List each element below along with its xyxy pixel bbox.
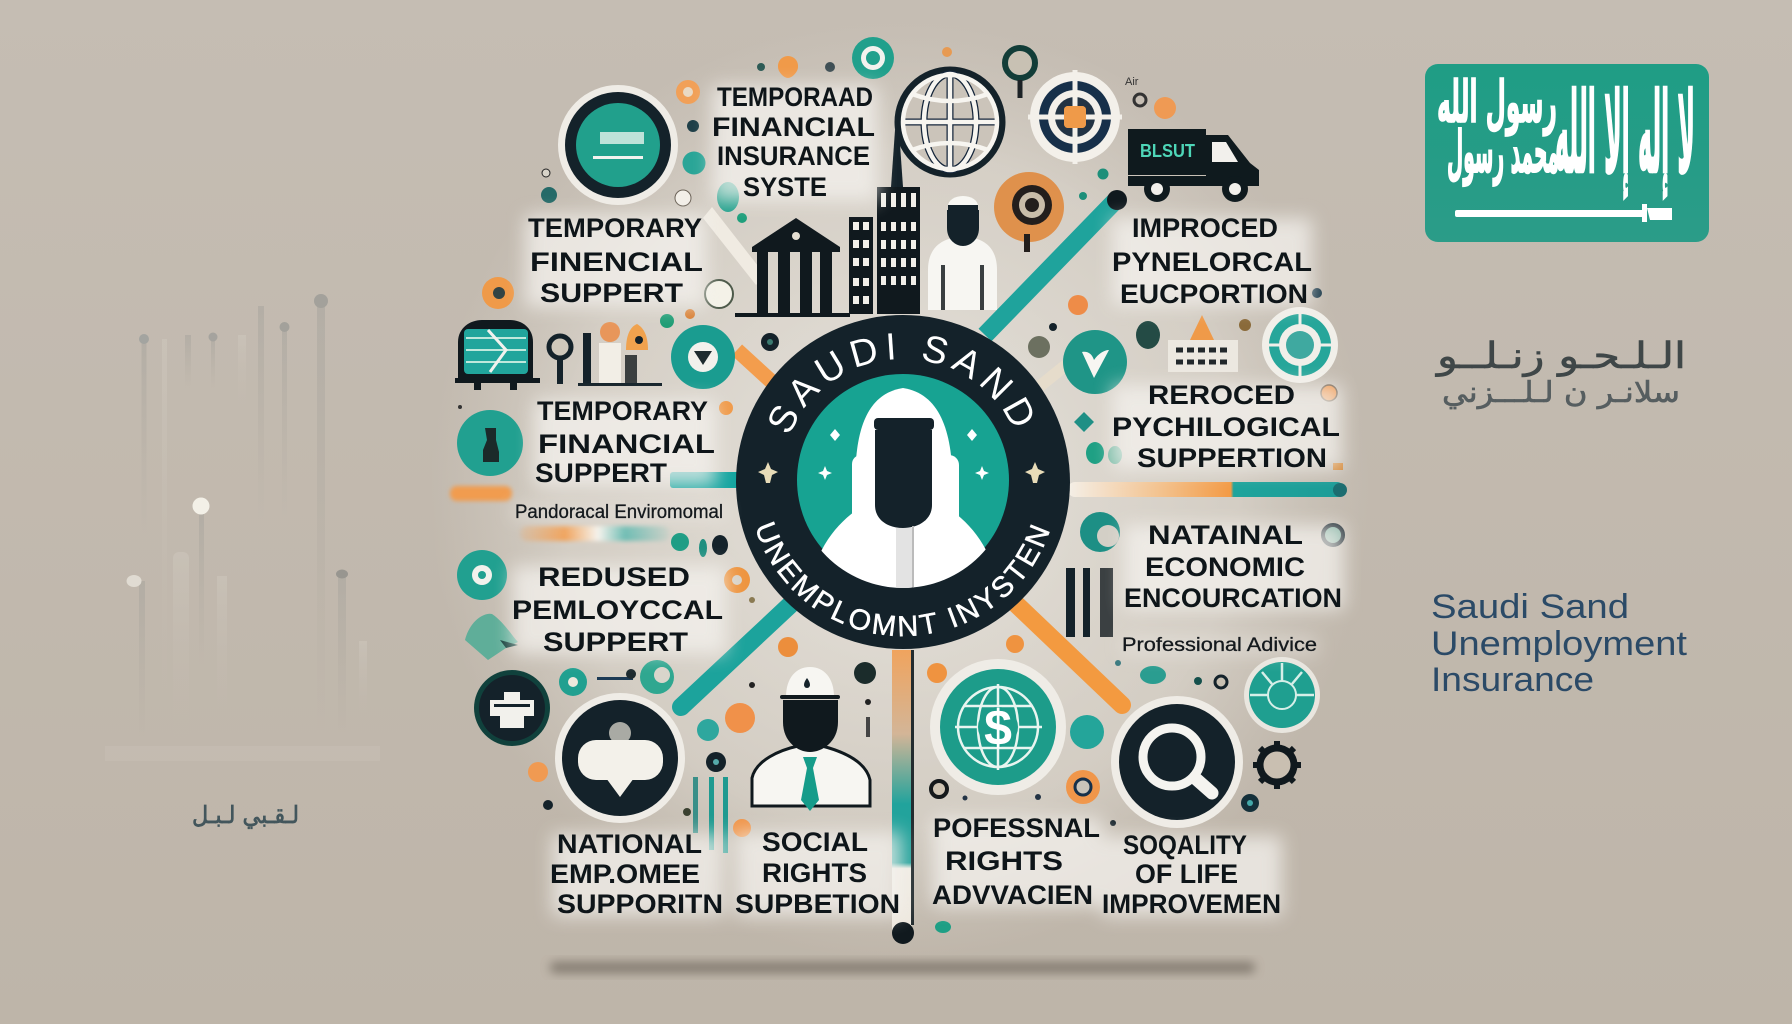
icon: globe <box>898 70 1002 174</box>
label: Redused Pemloyccal Suppert: REDUSED <box>538 562 690 592</box>
title: Saudi Sand Unemployment Insurance: Saudi Sand <box>1431 588 1629 626</box>
spoke: lower right orange <box>1015 603 1122 705</box>
icon: magnifier badge <box>1111 696 1243 828</box>
label: Natainal Economic Encourcation: ECONOMIC <box>1145 552 1305 582</box>
icon: gear <box>1253 741 1301 789</box>
label: Reroced Pychilogical Suppertion: SUPPERTION <box>1137 443 1327 473</box>
label: Natainal Economic Encourcation: NATAINAL <box>1148 520 1303 550</box>
label: Natainal Economic Encourcation: ENCOURCATION <box>1124 583 1342 613</box>
dollar sign: $ <box>984 700 1012 756</box>
spoke: left teal bar <box>670 472 740 488</box>
icon: delivery truck <box>1128 129 1259 202</box>
label: Improced Pynelorcal Eucportion: EUCPORTION <box>1120 279 1308 309</box>
spoke: lower left teal <box>681 605 790 707</box>
icon: small teal target <box>852 37 894 79</box>
label: Pofessnal Rights Advvacien: ADVVACIEN <box>932 880 1093 910</box>
spoke: upper left orange <box>737 350 772 382</box>
label: Reroced Pychilogical Suppertion <box>1112 380 1340 473</box>
label: Improced Pynelorcal Eucportion: PYNELORCAL <box>1112 247 1312 277</box>
label: Pofessnal Rights Advvacien <box>932 813 1100 910</box>
spoke: right horizontal gradient <box>1068 482 1347 497</box>
spoke: upper left cream <box>675 190 765 285</box>
faint bar chart: left side <box>105 294 380 761</box>
spoke: left blurred gradient <box>520 526 670 541</box>
icon: flag badge top left <box>558 85 678 205</box>
label: Temporary Financial Suppert (middle): TEMPORARY <box>537 396 708 426</box>
label: Pandoracal Enviromomal: Pandoracal Enviromomal <box>515 502 723 523</box>
emblem stars <box>758 429 1045 483</box>
label: Redused Pemloyccal Suppert: PEMLOYCCAL <box>512 595 723 625</box>
icon: office towers <box>849 130 920 314</box>
label: Temporary Finencial Suppert (top): FINENCIAL <box>530 247 703 277</box>
label: Temporary Finencial Suppert (top): SUPPERT <box>540 278 684 308</box>
ground shadow <box>550 962 1255 973</box>
label: Pofessnal Rights Advvacien: RIGHTS <box>945 846 1063 876</box>
title: Saudi Sand Unemployment Insurance: Unemployment <box>1431 625 1688 663</box>
label: Soqality of Life Improvemen: SOQALITY <box>1123 830 1247 860</box>
label: Social Rights Supbetion: RIGHTS <box>762 858 867 888</box>
label: Temporarad Financial Insurance Syste: SYSTE <box>743 172 827 202</box>
emblem figure <box>821 388 986 588</box>
label: Soqality of Life Improvemen <box>1102 830 1281 919</box>
label: Redused Pemloyccal Suppert <box>512 562 723 657</box>
label: Social Rights Supbetion: SUPBETION <box>735 889 900 919</box>
icon: target <box>1028 70 1122 164</box>
label: Temporarad Financial Insurance Syste: FINANCIAL <box>712 112 875 142</box>
label: Professional Adivice: Professional Adivice <box>1122 635 1317 656</box>
label: Temporary Financial Suppert (middle): SUPPERT <box>535 458 668 488</box>
truck label: BLSUT <box>1140 141 1195 161</box>
small annotation: Air <box>1125 76 1139 88</box>
emblem title top: SAUDI SAND <box>769 333 1032 432</box>
Arabic heading: right column: الـلـحـو زنـلــو <box>1435 336 1686 377</box>
label: Soqality of Life Improvemen: OF LIFE <box>1135 859 1238 889</box>
central light halo <box>430 20 1370 960</box>
label: Natainal Economic Encourcation <box>1124 520 1342 613</box>
label: Reroced Pychilogical Suppertion: PYCHILOGICAL <box>1112 412 1340 442</box>
icon: teal shield badge <box>457 550 507 600</box>
icon: teal ring badge <box>1262 307 1338 383</box>
Arabic caption: left side: لـقـبي لـبـل <box>192 801 299 829</box>
icon: check badge <box>1063 330 1127 394</box>
flag shahada calligraphy: رسول الله <box>1437 68 1557 137</box>
icon: orange swirl <box>994 172 1064 252</box>
icon: teal wheel globe <box>1244 657 1320 733</box>
icon: worker <box>752 667 870 811</box>
label: Temporary Financial Suppert (middle): FINANCIAL <box>538 429 715 459</box>
flag panel <box>1425 64 1709 242</box>
icon: monitor <box>455 320 540 390</box>
title: Saudi Sand Unemployment Insurance: Insurance <box>1431 661 1594 699</box>
emblem title bottom: UNEMPLOMNT INYSTEN <box>757 521 1050 636</box>
icon: robed man <box>928 196 997 310</box>
label: Social Rights Supbetion: SOCIAL <box>762 827 868 857</box>
label: Temporary Finencial Suppert (top) <box>528 213 703 308</box>
label: National Emp.ome Supporitn: EMP.OMEE <box>550 859 700 889</box>
connector spokes <box>450 190 1347 944</box>
icon: speech pill badge <box>555 693 685 823</box>
icon: bank <box>735 218 850 317</box>
spoke: cream stub by check icon <box>1040 365 1066 386</box>
label: Pofessnal Rights Advvacien: POFESSNAL <box>933 813 1100 843</box>
icon: magnifier and bottles <box>549 322 662 386</box>
label: Temporarad Financial Insurance Syste: TEMPORAAD <box>717 82 873 112</box>
label: National Emp.ome Supporitn: NATIONAL <box>557 829 702 859</box>
label: Soqality of Life Improvemen: IMPROVEMEN <box>1102 889 1281 919</box>
label halos <box>512 86 1344 916</box>
spoke: left orange blur <box>450 486 512 501</box>
central emblem <box>736 315 1070 649</box>
label: Temporary Finencial Suppert (top): TEMPORARY <box>528 213 702 243</box>
title: Saudi Sand Unemployment Insurance <box>1431 588 1688 699</box>
icon: dollar globe <box>930 659 1066 795</box>
decorative dots <box>458 47 1343 933</box>
emblem teal disc <box>797 374 1009 586</box>
icon: teal bottle badge <box>457 410 523 476</box>
label: National Emp.ome Supporitn <box>550 829 723 919</box>
flag shahada calligraphy <box>1437 68 1695 200</box>
icon: leaf <box>465 614 518 660</box>
label: Improced Pynelorcal Eucportion: IMPROCED <box>1132 213 1278 243</box>
spoke: upper right teal <box>985 190 1127 335</box>
label: Social Rights Supbetion <box>735 827 900 919</box>
label: Temporarad Financial Insurance Syste: INSURANCE <box>717 141 870 171</box>
emblem ring <box>736 315 1070 649</box>
flag shahada calligraphy: محمد رسول <box>1447 118 1559 187</box>
spoke: vertical gradient <box>892 650 914 944</box>
icon: dark teal mask badge <box>474 670 550 746</box>
icon: teal diamond badge <box>671 325 735 389</box>
icon: small building <box>1168 315 1238 372</box>
label: National Emp.ome Supporitn: SUPPORITN <box>557 889 723 919</box>
icon: triple bars <box>1066 568 1113 637</box>
Arabic heading: right column <box>1435 336 1686 410</box>
Arabic heading: right column: سلانـر ن لـلـــزني <box>1442 375 1680 410</box>
label: Temporary Financial Suppert (middle) <box>535 396 715 488</box>
label: Improced Pynelorcal Eucportion <box>1112 213 1312 309</box>
label: Redused Pemloyccal Suppert: SUPPERT <box>543 627 689 657</box>
flag sword <box>1455 204 1672 222</box>
label: Temporarad Financial Insurance Syste <box>712 82 875 202</box>
icon: dark ring pendant <box>1005 48 1035 98</box>
label: Reroced Pychilogical Suppertion: REROCED <box>1148 380 1295 410</box>
